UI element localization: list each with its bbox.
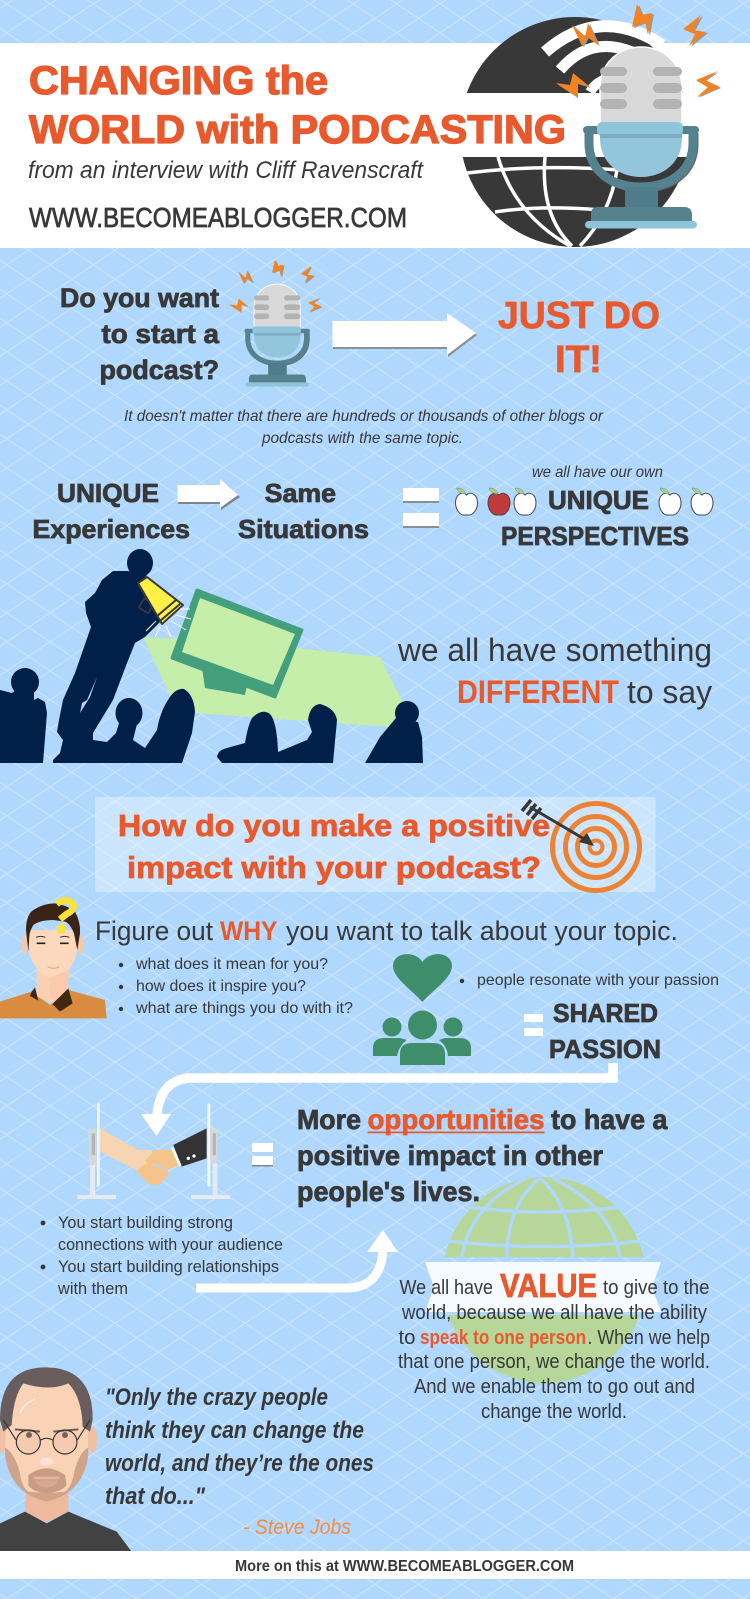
round glasses (3, 1420, 90, 1454)
call to action: just do it: JUST DO (498, 295, 660, 337)
bullet list: why questions (119, 956, 353, 1017)
text: we all have value: to (398, 1327, 416, 1349)
speaker silhouette (53, 549, 160, 763)
question mark (57, 900, 74, 933)
heading: impact with your podcast? (127, 850, 541, 885)
arrow: curved up to opportunities (196, 1230, 398, 1288)
text: people resonate: people resonate with your passion (477, 972, 719, 989)
ribbon (425, 1262, 661, 1312)
panel: positive impact heading (95, 797, 656, 892)
text: we all have value: . When we help (588, 1327, 710, 1349)
quote: think they can change the (105, 1417, 364, 1444)
icon: green globe (425, 1177, 661, 1383)
text: more opportunities: More (297, 1104, 361, 1135)
text: we all have our own: we all have our own (532, 464, 663, 481)
icon: dark globe (460, 17, 690, 247)
text: same situations: Same (265, 478, 336, 508)
title (29, 59, 566, 152)
text: unique experiences: UNIQUE (57, 478, 159, 508)
bullet list: connections: You start building relationships (58, 1257, 279, 1276)
call to action: just do it (498, 295, 660, 381)
call to action: just do it: IT! (555, 339, 602, 381)
text: we all have value: We all have (400, 1277, 493, 1299)
text: unique perspectives: UNIQUE (548, 485, 649, 515)
equals sign (403, 488, 439, 528)
text: we all have value: that one person, we change the world. (398, 1351, 710, 1373)
text: something different to say (397, 632, 712, 710)
bullet list: connections: with them (57, 1279, 128, 1298)
heading (118, 808, 550, 885)
question: do you want to start a podcast: to start a (102, 319, 220, 349)
text: we all have value: speak to one person (420, 1327, 586, 1349)
megaphone (138, 577, 191, 637)
text: same situations (238, 478, 369, 544)
bullet list: why questions: how does it inspire you? (136, 978, 306, 995)
quote: "Only the crazy people (105, 1384, 328, 1411)
question: do you want to start a podcast (60, 283, 220, 385)
website url: WWW.BECOMEABLOGGER.COM (29, 202, 407, 233)
text: we all have value: change the world. (481, 1401, 627, 1423)
text: we all have value: VALUE (500, 1267, 597, 1304)
question: do you want to start a podcast: Do you want (60, 283, 219, 313)
caption: other blogs (124, 408, 604, 447)
quote (105, 1384, 374, 1510)
quote: world, and they’re the ones (105, 1450, 374, 1477)
text: we all have value: world, because we all have the ability (401, 1302, 707, 1324)
footer band: More on this at WWW.BECOMEABLOGGER.COM (235, 1558, 574, 1575)
quote: that do..." (105, 1483, 206, 1510)
icon: tilted monitor (172, 590, 302, 697)
text: same situations: Situations (238, 514, 369, 544)
quote attribution: - Steve Jobs (243, 1516, 351, 1539)
text: unique perspectives: PERSPECTIVES (501, 521, 689, 551)
icon: row of apples (456, 488, 713, 515)
text: figure out why (95, 916, 678, 946)
caption: other blogs: It doesn't matter that there are hundreds or thousands of other blogs or (124, 408, 604, 425)
illustration: speaker and audience (0, 549, 423, 763)
text: unique experiences: Experiences (32, 514, 190, 544)
text: we all have value: to give to the (603, 1277, 710, 1299)
equals sign (524, 1014, 543, 1036)
text: something different to say: DIFFERENT (457, 674, 619, 710)
text: more opportunities: to have a (551, 1104, 668, 1135)
text: more opportunities: opportunities (368, 1104, 544, 1135)
arrow: experiences to situations (178, 479, 240, 510)
text: more opportunities: people's lives. (297, 1176, 480, 1207)
projected light (143, 637, 403, 727)
text: we all have value (398, 1267, 710, 1423)
text: shared passion: PASSION (549, 1034, 661, 1064)
icon: target with arrow (522, 800, 640, 890)
text: shared passion (549, 998, 661, 1064)
icon: group of people (373, 1010, 471, 1065)
text: more opportunities: positive impact in other (297, 1140, 603, 1171)
title: CHANGING the (29, 59, 328, 103)
icon: heart (393, 954, 452, 1002)
footer band (0, 1551, 750, 1579)
text: figure out why: you want to talk about your topic. (286, 916, 678, 946)
arrow: curved from shared passion (141, 1063, 613, 1136)
text: unique experiences (32, 478, 190, 544)
panel: header band (0, 4, 750, 248)
icon: small microphone (229, 260, 322, 387)
bullet list: why questions: what are things you do with it? (135, 1000, 353, 1017)
text: figure out why: Figure out (95, 916, 213, 946)
text: shared passion: SHARED (553, 998, 658, 1028)
icon: handshake (77, 1103, 230, 1199)
bullet list: why questions: what does it mean for you? (135, 956, 328, 973)
arrow: to just do it (332, 313, 477, 357)
text: more opportunities (297, 1104, 668, 1207)
title: WORLD with PODCASTING (29, 108, 566, 152)
question: do you want to start a podcast: podcast? (100, 355, 219, 385)
text: something different to say: we all have something (397, 632, 712, 668)
subtitle: from an interview with Cliff Ravenscraft (28, 157, 424, 184)
equals sign (252, 1143, 273, 1166)
portrait: Steve Jobs (0, 1367, 132, 1552)
heading: How do you make a positive (118, 808, 550, 843)
icon: large microphone with lightning (556, 4, 721, 228)
text: we all have value: And we enable them to go out and (414, 1376, 695, 1398)
bullet list: connections: connections with your audience (58, 1235, 283, 1254)
text: something different to say: to say (627, 674, 712, 710)
text: figure out why: WHY (220, 916, 278, 946)
icon: thinking man (0, 900, 107, 1018)
bullet list: connections: You start building strong (58, 1213, 233, 1232)
text: unique perspectives (501, 485, 689, 551)
caption: other blogs: podcasts with the same topic. (261, 430, 463, 447)
audience silhouettes (0, 668, 423, 763)
bullet list: connections (41, 1213, 283, 1298)
